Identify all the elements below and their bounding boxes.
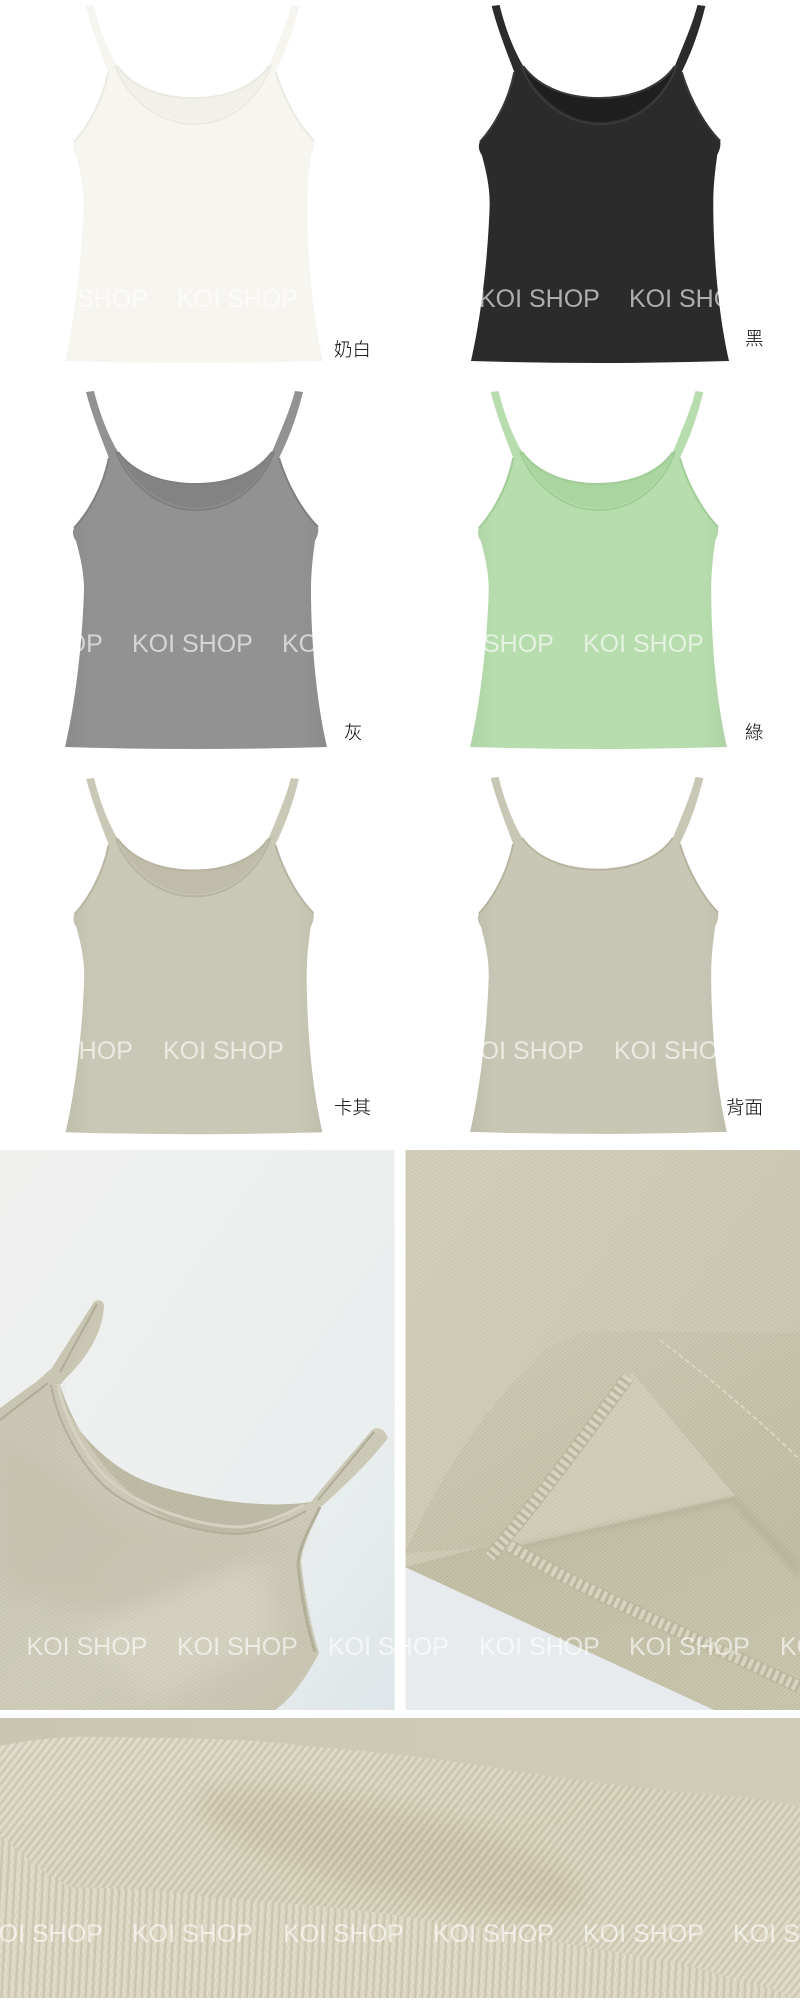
lower hem <box>405 1496 800 1710</box>
photo: fabric knit close-up <box>0 1718 800 2000</box>
watermark row 3: KOI SHOP <box>12 1037 133 1065</box>
neckline stitching <box>51 1385 306 1534</box>
panel: khaki camisole back view <box>470 777 727 1134</box>
inner seam triangle <box>500 1372 735 1550</box>
watermark row 4: KOI SHOP <box>479 1633 600 1661</box>
label: back view: 背面 <box>726 1097 763 1118</box>
label: black: 黑 <box>745 328 764 349</box>
knit foreground <box>0 1835 800 2000</box>
panel: cream white camisole <box>65 5 323 363</box>
watermark row 2: KOI SHOP <box>433 630 554 658</box>
watermark row 4 <box>26 1633 800 1661</box>
watermark row 3: KOI SHOP <box>313 1037 434 1065</box>
watermark row 3 <box>12 1037 735 1065</box>
ribbed fabric drum <box>0 1737 800 2000</box>
watermark row 2 <box>0 630 800 658</box>
watermark row 3: KOI SHOP <box>163 1037 284 1065</box>
watermark row 5: KOI SHOP <box>132 1920 253 1948</box>
watermark row 4: KOI SHOP <box>629 1633 750 1661</box>
label: grey: 灰 <box>344 722 363 743</box>
photo: hem and stitching close-up <box>405 1150 800 1710</box>
overlock stitching <box>490 1377 628 1557</box>
garment front and straps <box>0 1300 388 1710</box>
watermark row 4: KOI SHOP <box>177 1633 298 1661</box>
watermark row 1: KOI SHOP <box>328 285 449 313</box>
watermark row 3: KOI SHOP <box>614 1037 735 1065</box>
panel: grey camisole <box>65 391 327 749</box>
watermark row 1: KOI SHOP <box>27 285 148 313</box>
panel: green camisole <box>470 391 727 749</box>
label: cream white: 奶白 <box>334 339 371 360</box>
label: green: 綠 <box>745 722 764 743</box>
watermark row 2: KOI SHOP <box>282 630 403 658</box>
watermark row 1: KOI SHOP <box>629 285 750 313</box>
photo: neckline close-up <box>0 1150 394 1710</box>
panel: black camisole <box>471 5 729 363</box>
background surface <box>406 1567 714 1710</box>
watermark row 1: KOI SHOP <box>177 285 298 313</box>
panel: khaki camisole <box>66 778 322 1134</box>
watermark row 4: KOI SHOP <box>328 1633 449 1661</box>
watermark row 2: KOI SHOP <box>583 630 704 658</box>
watermark row 5: KOI SHOP <box>433 1920 554 1948</box>
watermark row 2: KOI SHOP <box>132 630 253 658</box>
fold shadow <box>520 1496 800 1574</box>
watermark row 5 <box>0 1920 800 1948</box>
watermark row 5: KOI SHOP <box>283 1920 404 1948</box>
watermark row 1 <box>27 285 750 313</box>
watermark row 5: KOI SHOP <box>583 1920 704 1948</box>
upper fold <box>466 1468 800 1548</box>
watermark row 3: KOI SHOP <box>463 1037 584 1065</box>
watermark row 1: KOI SHOP <box>479 285 600 313</box>
label: khaki: 卡其 <box>334 1097 371 1118</box>
watermark row 4: KOI SHOP <box>26 1633 147 1661</box>
